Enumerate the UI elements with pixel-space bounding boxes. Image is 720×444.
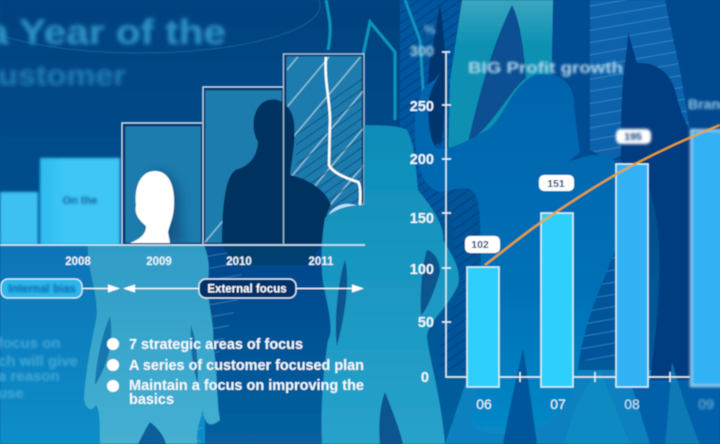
bar 07 bbox=[541, 213, 573, 387]
silhouette: dark man in 2010 bbox=[222, 99, 331, 265]
bullet list: basics bbox=[129, 392, 174, 408]
bar 2009 bbox=[124, 125, 202, 244]
bar chart bbox=[410, 22, 720, 412]
blurred title: ustomer bbox=[0, 60, 126, 92]
bar 2008 bbox=[40, 158, 120, 245]
year labels: 2008 bbox=[65, 256, 91, 268]
blurred percent label: % bbox=[424, 22, 436, 37]
axis labels: 0 bbox=[421, 370, 429, 386]
teal area top bbox=[448, 0, 555, 158]
white head silhouette bbox=[130, 171, 186, 243]
bullet list: A series of customer focused plan bbox=[129, 358, 364, 374]
small blurred bar bbox=[0, 192, 38, 245]
dark spikes bbox=[428, 5, 446, 147]
axis labels bbox=[410, 44, 434, 386]
bar 2010 bbox=[204, 89, 283, 244]
silhouette: right figure bbox=[322, 125, 459, 444]
axis labels: 300 bbox=[410, 44, 434, 60]
bar chart: 151 bbox=[547, 178, 565, 190]
bar 2008 label: On the bbox=[63, 195, 97, 207]
silhouette: pale head in 2011 bbox=[323, 204, 364, 244]
value labels bbox=[465, 236, 500, 253]
bullet list: Maintain a focus on improving the bbox=[129, 378, 364, 394]
silhouette: teal figure outlines behind chart bbox=[326, 0, 425, 120]
bar chart: 195 bbox=[624, 131, 642, 143]
year labels: 2010 bbox=[226, 256, 252, 268]
category labels: 08 bbox=[624, 396, 640, 412]
baseline bbox=[0, 244, 365, 246]
bullet list bbox=[107, 337, 364, 408]
blurred side text: ch will give bbox=[0, 353, 78, 370]
bar 08 bbox=[616, 164, 648, 387]
blurred side text bbox=[0, 335, 78, 402]
bar 2011 bbox=[285, 55, 363, 244]
silhouette: woman raising arm bbox=[415, 72, 630, 434]
axis labels: 250 bbox=[410, 99, 434, 115]
lower band bbox=[445, 370, 700, 444]
axes bbox=[442, 52, 690, 382]
category labels: 06 bbox=[476, 396, 492, 412]
year labels: 2009 bbox=[146, 256, 172, 268]
pill: internal bias: Internal bias bbox=[8, 284, 76, 296]
pill: external focus: External focus bbox=[207, 284, 287, 296]
timeline arrows bbox=[82, 284, 364, 292]
category labels: 09 bbox=[698, 396, 714, 412]
pill: external focus bbox=[199, 279, 296, 298]
axis labels: 50 bbox=[418, 315, 434, 331]
blurred chart heading: BIG Profit growth bbox=[468, 60, 623, 77]
bar chart: 102 bbox=[471, 239, 489, 251]
lower foreground figures bbox=[503, 348, 700, 444]
silhouette: dark man behind woman bbox=[620, 32, 720, 380]
box dividers bbox=[122, 54, 364, 244]
white crack line bbox=[326, 57, 360, 222]
silhouette: central light figure bbox=[84, 245, 220, 444]
axis labels: 150 bbox=[410, 211, 434, 227]
year labels bbox=[65, 256, 334, 268]
blurred title bbox=[0, 13, 226, 92]
category labels bbox=[476, 396, 714, 412]
axis labels: 100 bbox=[410, 262, 434, 278]
bar 09 blurred bbox=[691, 130, 720, 386]
bullet list: 7 strategic areas of focus bbox=[129, 337, 303, 353]
category labels: 07 bbox=[550, 396, 566, 412]
axis labels: 200 bbox=[410, 152, 434, 168]
growth curve bbox=[485, 125, 720, 265]
pill: internal bias bbox=[1, 279, 82, 298]
year labels: 2011 bbox=[309, 256, 334, 268]
bar 06 bbox=[467, 267, 499, 387]
